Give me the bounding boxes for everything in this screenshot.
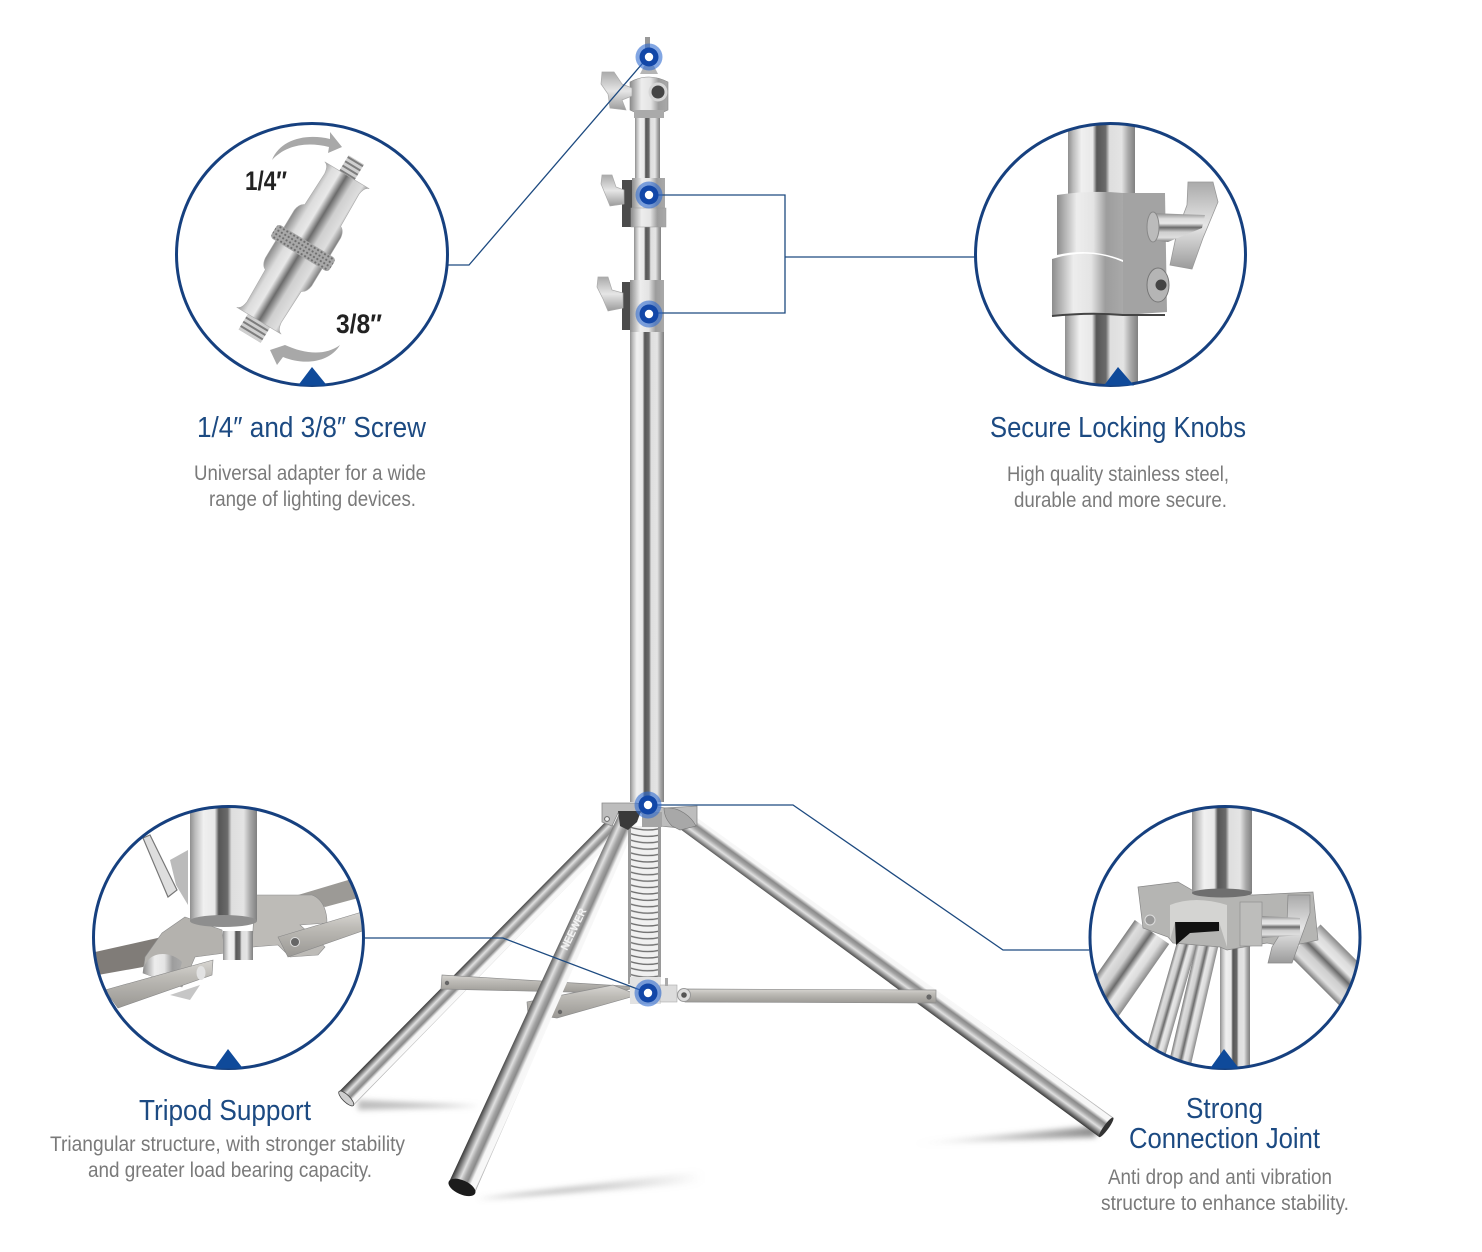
connector: tripod [365,938,648,993]
leg brand mark: NEEWER [559,907,589,952]
mast top [635,116,660,180]
left strut [441,975,640,993]
connector: joint [648,805,1089,950]
upper knob [601,175,624,206]
light stand [337,37,1115,1200]
panel: joint [1088,805,1362,1214]
lower lock collar [622,280,664,332]
detail circle: adapter screw [176,124,448,386]
marker: top [636,44,662,70]
heading: Strong [1186,1093,1263,1125]
marker: lower knob [636,300,662,328]
right leg [675,808,1115,1138]
size label 3/8: 3/8″ [336,309,382,339]
main mast lower [630,330,664,802]
head block [630,37,668,118]
marker: upper knob [636,182,662,208]
description: durable and more secure. [1014,489,1227,512]
description: High quality stainless steel, [1007,463,1229,486]
description: and greater load bearing capacity. [88,1159,372,1182]
left rear leg [337,819,621,1108]
upper lock collar [622,178,666,227]
description: range of lighting devices. [209,488,416,511]
size label 1/4: 1/4″ [245,166,287,196]
front leg [446,812,641,1200]
description: Universal adapter for a wide [194,462,426,485]
description [194,462,426,511]
front strut [527,985,638,1018]
heading: Connection Joint [1129,1123,1320,1155]
marker: tripod hub [634,980,662,1006]
lower hub [630,977,690,1004]
spring column [628,810,661,984]
connector: screw [448,57,648,265]
heading: Tripod Support [139,1095,311,1127]
detail circle: locking knob [976,120,1246,388]
panel: knobs [976,120,1246,512]
right strut [685,989,936,1003]
floor shadows [358,1100,1096,1199]
top knob [601,72,632,110]
connector: knobs [649,195,975,313]
panel: screw [176,124,448,511]
description: Anti drop and anti vibration [1108,1166,1332,1189]
lower knob [597,277,623,311]
heading: 1/4″ and 3/8″ Screw [197,412,427,444]
base clamp [602,803,697,830]
description: structure to enhance stability. [1101,1192,1349,1215]
mast middle [634,225,661,283]
marker: joint [634,792,662,818]
panel: tripod [50,803,405,1182]
description: Triangular structure, with stronger stability [50,1133,405,1156]
heading: Secure Locking Knobs [990,412,1246,444]
description [1101,1166,1349,1215]
description [1007,463,1229,512]
heading [1129,1093,1320,1155]
description [50,1133,405,1182]
detail circle: connection joint [1088,805,1362,1070]
detail circle: tripod support [94,803,365,1068]
